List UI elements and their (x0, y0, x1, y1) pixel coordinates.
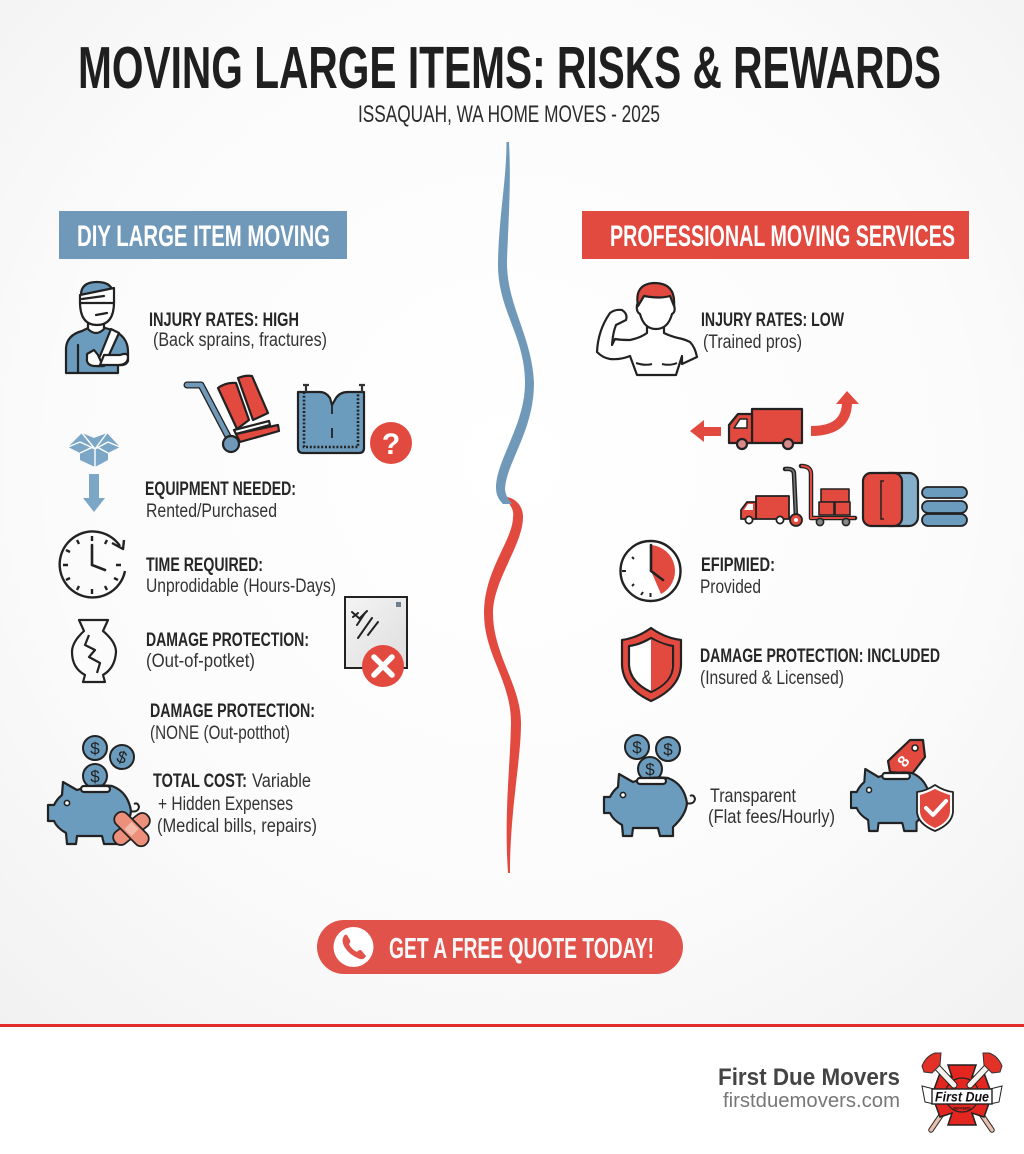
icon: shield half red (622, 628, 681, 701)
damage protection text, none: DAMAGE PROTECTION: (150, 700, 315, 722)
icon: piggy bank with coins (604, 735, 695, 836)
icon: piggy bank with coins and bandage: $ (114, 747, 130, 768)
injury rates text (149, 309, 327, 351)
icon: question mark badge: ? (382, 428, 400, 461)
icon: piggy bank with price tag and shield (851, 740, 953, 831)
efipmied text: EFIPMIED: (701, 554, 775, 576)
heading banner: DIY (59, 211, 347, 259)
total cost text: TOTAL COST: (153, 770, 247, 792)
transparent pricing text (708, 786, 835, 828)
total cost text: (Medical bills, repairs) (157, 816, 317, 837)
call to action button (317, 920, 683, 974)
injury rates text: (Back sprains, fractures) (153, 330, 327, 351)
equipment needed text (145, 478, 296, 522)
damage protection included text: DAMAGE PROTECTION: INCLUDED (700, 645, 940, 667)
subtitle: ISSAQUAH, WA HOME MOVES - 2025 (358, 101, 660, 128)
icon: flat dolly with boxes (801, 466, 855, 526)
damage protection included text (700, 645, 940, 689)
panel: professional moving services (582, 211, 969, 836)
icon: piggy bank with coins: $ (663, 740, 673, 759)
logo: First Due badge with axes: MOVERS (953, 1106, 971, 1110)
total cost text: Variable (252, 771, 311, 792)
damage protection text, out of pocket: DAMAGE PROTECTION: (146, 629, 309, 651)
icon: clock with arrow (60, 531, 125, 597)
call to action button: GET A FREE QUOTE TODAY! (389, 933, 654, 965)
efipmied text: Provided (700, 577, 761, 598)
transparent pricing text: Transparent (710, 786, 797, 807)
central divider: blue and red wavy line (484, 142, 534, 873)
injury rates text: INJURY RATES: HIGH (149, 309, 299, 331)
time required text: Unprodidable (Hours-Days) (146, 576, 336, 597)
icon: piggy bank with coins and bandage (48, 736, 153, 849)
footer (0, 1024, 1024, 1154)
icon: piggy bank with coins: $ (632, 738, 642, 757)
icon: left arrow (690, 420, 721, 442)
total cost text (153, 770, 317, 837)
icon: mattress (863, 473, 918, 526)
total cost text: + Hidden Expenses (158, 794, 293, 815)
icon: scratched panel with X badge (345, 597, 407, 687)
icon: curved up arrow (811, 391, 859, 431)
icon: injured person with bandage and sling (66, 282, 128, 373)
icon: piggy bank with coins: $ (645, 760, 655, 779)
icon: box with down arrow (68, 433, 120, 512)
transparent pricing text: (Flat fees/Hourly) (708, 807, 835, 828)
equipment needed text: EQUIPMENT NEEDED: (145, 478, 296, 500)
time required text (146, 554, 336, 597)
icon: strong flexing mover (597, 283, 697, 375)
footer brand name: First Due Movers (718, 1064, 900, 1091)
heading banner: professional (582, 211, 969, 259)
damage protection text, none: (NONE (Out-potthot) (150, 723, 290, 744)
equipment needed text: Rented/Purchased (146, 501, 277, 522)
heading banner: DIY: DIY LARGE ITEM MOVING (77, 220, 330, 253)
icon: red moving truck (729, 409, 802, 449)
logo: First Due badge with axes (922, 1053, 1002, 1130)
injury rates low text (701, 309, 844, 353)
icon: cracked vase (72, 620, 116, 682)
injury rates low text: INJURY RATES: LOW (701, 309, 844, 331)
logo: First Due badge with axes: First Due (935, 1088, 989, 1104)
damage protection text, none (150, 700, 315, 744)
time required text: TIME REQUIRED: (146, 554, 263, 576)
icon: small truck with hand truck (741, 469, 802, 526)
icon: question mark badge (370, 422, 412, 464)
icon: piggy bank with coins and bandage: $ (90, 739, 100, 758)
panel: DIY large item moving (48, 211, 412, 849)
icon: piggy bank with price tag and shield: 8 (895, 753, 914, 771)
efipmied text (700, 554, 775, 598)
damage protection text, out of pocket (146, 629, 309, 672)
icon: moving blanket (298, 385, 365, 453)
icon: hand truck with red load (187, 376, 279, 452)
footer website: firstduemovers.com (723, 1090, 900, 1112)
damage protection text, out of pocket: (Out-of-potket) (146, 651, 255, 672)
injury rates low text: (Trained pros) (703, 332, 802, 353)
icon: clock with red wedge (620, 541, 680, 601)
icon: stacked blankets (922, 487, 967, 526)
icon: piggy bank with coins and bandage: $ (90, 767, 100, 786)
damage protection included text: (Insured & Licensed) (700, 668, 844, 689)
